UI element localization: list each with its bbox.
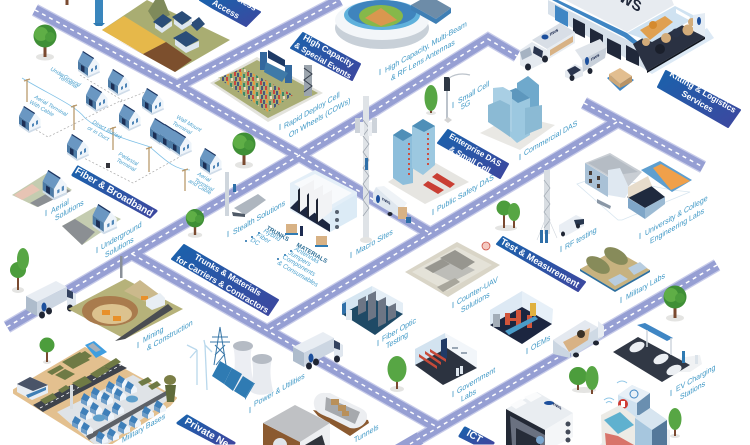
label: rapid deploy: Rapid Deploy Cell bbox=[284, 90, 340, 131]
label: power: Power & Utilities bbox=[254, 371, 305, 409]
panel: fixed wireless access bbox=[66, 0, 230, 72]
tunnel tube bbox=[314, 393, 367, 428]
panel: ict: nws bbox=[553, 401, 562, 412]
small cell pole bbox=[444, 74, 470, 123]
hq building bbox=[17, 377, 48, 400]
truck: loading 1 bbox=[520, 23, 575, 70]
label: macro sites: Macro Sites bbox=[356, 227, 393, 257]
pylon bbox=[210, 327, 230, 365]
banner: trunks and materials: Trunks & Materials bbox=[193, 252, 263, 298]
solar panels bbox=[212, 361, 255, 400]
label: underground solutions: Underground bbox=[101, 220, 142, 252]
label: government labs: Labs bbox=[461, 386, 476, 404]
classroom bbox=[627, 185, 665, 208]
label: ev charging: Stations bbox=[680, 379, 705, 402]
rf van bbox=[559, 215, 584, 236]
panel: high capacity events concert bbox=[210, 50, 323, 122]
terminal labels bbox=[28, 67, 215, 196]
drone mark bbox=[482, 242, 490, 250]
terminal labels: and Cable bbox=[187, 179, 212, 196]
panel: ict bbox=[506, 392, 573, 445]
front wall bbox=[548, 0, 647, 70]
panel: ev charging bbox=[613, 323, 702, 382]
panel: oems bbox=[490, 291, 553, 344]
label: tunnels: Tunnels bbox=[354, 422, 378, 445]
banner: fiber and broadband: Fiber & Broadband bbox=[73, 166, 155, 219]
aerial cable bbox=[22, 78, 190, 170]
terminal labels: Terminal bbox=[171, 121, 193, 137]
terminal labels: UnderGround bbox=[49, 67, 82, 89]
label: mining: & Construction bbox=[147, 318, 193, 353]
label: university: University & College bbox=[645, 193, 708, 238]
terminal labels: or in Duct bbox=[86, 126, 110, 143]
truck: loading 1: nws bbox=[549, 27, 559, 38]
label: counter uav: Solutions bbox=[461, 290, 490, 315]
banner: high capacity: High Capacity bbox=[301, 32, 356, 69]
pedestal terminal bbox=[106, 163, 110, 168]
list: trunks: TRUNKS bbox=[265, 226, 290, 243]
vehicles bbox=[40, 351, 161, 404]
poles bbox=[24, 79, 188, 191]
terminal labels: Direct Buried bbox=[91, 120, 123, 141]
trees: test and measurement bbox=[495, 200, 520, 231]
label: high capacity antennas: & RF Lens Antennas bbox=[391, 37, 455, 83]
label: rapid deploy: On Wheels (COWs) bbox=[289, 96, 351, 140]
list: materials: & Consumables bbox=[276, 260, 320, 289]
panel: kitting warehouse bbox=[548, 0, 714, 74]
corner pier bbox=[693, 13, 705, 37]
shelter truck: nws bbox=[382, 196, 391, 207]
label: small cell 5g: Small Cell bbox=[458, 79, 489, 106]
banner: enterprise das: & Small Cell bbox=[447, 144, 492, 175]
truck: left road bbox=[26, 281, 76, 318]
site outline bbox=[577, 176, 690, 220]
label: military labs: Military Labs bbox=[626, 271, 665, 302]
tree stub bbox=[66, 0, 68, 5]
banner: kitting and logistics: Services bbox=[680, 88, 715, 115]
terminal labels: Terminal bbox=[57, 75, 79, 91]
tunnel base bbox=[313, 410, 369, 436]
label: high capacity antennas: High Capacity, Multi-Beam bbox=[385, 19, 467, 75]
terminal labels: With Cable bbox=[28, 100, 55, 118]
label: military bases: Military Bases bbox=[122, 411, 165, 445]
panel: fiber and broadband homes bbox=[19, 51, 222, 196]
dock doors bbox=[555, 5, 639, 66]
panel: military bases bbox=[14, 341, 176, 444]
label: small cell 5g: 5G bbox=[461, 98, 470, 112]
portico bbox=[608, 168, 630, 198]
courtyard car bbox=[597, 199, 611, 209]
truck: mid road bbox=[293, 332, 343, 370]
cooling towers bbox=[232, 341, 273, 395]
panel: mining bbox=[68, 256, 183, 341]
panel: fiber optic testing bbox=[342, 286, 403, 335]
parking deck bbox=[411, 0, 451, 24]
label: oems: OEMs bbox=[531, 333, 550, 353]
label: rf testing: RF testing bbox=[565, 225, 597, 252]
gray compound bbox=[57, 375, 172, 444]
left wing bbox=[585, 163, 608, 197]
list: trunks: Hybrid bbox=[262, 228, 282, 243]
label: ev charging: EV Charging bbox=[676, 362, 715, 394]
panel: stealth solutions bbox=[225, 172, 266, 217]
terminal labels: Aerial bbox=[195, 171, 212, 184]
label: underground solutions: Solutions bbox=[105, 235, 134, 260]
glass block bbox=[635, 408, 667, 445]
pallets and worker bbox=[285, 224, 328, 247]
label: mining: Mining bbox=[143, 324, 163, 345]
tan base bbox=[14, 348, 176, 443]
panel: public safety das bbox=[388, 119, 469, 204]
panel: university labs bbox=[577, 153, 692, 220]
panel: aerial solutions plot bbox=[12, 170, 72, 207]
stock bbox=[640, 16, 696, 54]
server racks bbox=[298, 180, 332, 223]
robots bbox=[505, 310, 532, 328]
wireless tower bbox=[93, 0, 105, 26]
label: government labs: Government bbox=[457, 365, 496, 396]
label: aerial solutions: Solutions bbox=[55, 198, 84, 223]
list: materials: Jumpers bbox=[286, 249, 313, 269]
panel: power and utilities bbox=[187, 327, 273, 400]
panel: trunks warehouse bbox=[285, 170, 357, 247]
terminal labels: Aerial Terminal bbox=[32, 94, 69, 119]
icon: tree by small cell bbox=[424, 85, 438, 115]
panel: military labs bbox=[580, 243, 650, 292]
pallet bbox=[607, 68, 634, 91]
label: public safety: Public Safety DAS bbox=[437, 172, 494, 214]
banner: kitting and logistics: Kitting & Logistics bbox=[668, 69, 738, 115]
label: stealth solutions: Stealth Solutions bbox=[233, 198, 285, 237]
panel: underground solutions plot bbox=[62, 204, 121, 245]
trees: far left pair bbox=[10, 248, 29, 293]
list: materials: Components bbox=[281, 254, 317, 279]
banner: high capacity: & Special Events bbox=[293, 41, 353, 81]
cooling units bbox=[335, 210, 339, 229]
terminal labels: Wall Mount bbox=[175, 115, 203, 134]
fire trucks bbox=[423, 173, 455, 194]
banner: test and measurement: Test & Measurement bbox=[499, 236, 581, 290]
orange floor bbox=[641, 161, 692, 192]
list: materials bbox=[276, 243, 328, 289]
panel: counter uav bbox=[405, 242, 500, 297]
tree: right bbox=[664, 286, 686, 322]
label: university: Engineering Labs bbox=[650, 206, 704, 246]
banner: trunks and materials: for Carriers & Contractors bbox=[174, 254, 271, 315]
shaft cube bbox=[263, 423, 300, 445]
wifi marks bbox=[604, 381, 627, 403]
terminal labels: Pedestal bbox=[117, 152, 140, 168]
banner: ict bbox=[460, 428, 493, 445]
blue tents bbox=[72, 375, 166, 444]
truck: on right road bbox=[553, 320, 604, 358]
panel: commercial das bbox=[480, 76, 555, 150]
banner: kitting and logistics bbox=[658, 69, 740, 127]
roof bbox=[585, 153, 642, 188]
label: commercial das: Commercial DAS bbox=[524, 118, 577, 158]
wind turbines bbox=[187, 340, 212, 390]
tree: center bbox=[232, 132, 256, 168]
roof bbox=[565, 0, 674, 32]
list: materials: MATERIALS bbox=[295, 243, 328, 265]
rural houses bbox=[153, 11, 205, 47]
list: materials: Antennas bbox=[292, 245, 321, 266]
panel: macro site tower bbox=[355, 96, 411, 243]
interior floor bbox=[633, 20, 705, 71]
list: trunks: Fiber bbox=[255, 232, 272, 246]
main road bbox=[33, 362, 127, 412]
COW mast bbox=[304, 65, 312, 96]
inner road bbox=[86, 391, 169, 440]
harbour bbox=[85, 341, 107, 358]
rural plot bbox=[102, 0, 230, 72]
pad bbox=[640, 28, 714, 74]
dashed service lines bbox=[28, 75, 183, 183]
houses bbox=[19, 51, 222, 175]
tree: military bbox=[40, 338, 54, 364]
truck: loading 2: nws bbox=[591, 52, 600, 63]
racks bbox=[358, 291, 396, 327]
tree: stealth bbox=[186, 209, 204, 238]
panel: hospital bbox=[600, 381, 670, 445]
list: trunks: DC bbox=[249, 237, 261, 248]
list: trunks bbox=[245, 226, 290, 248]
label: small cell 5g bbox=[453, 79, 489, 112]
panel: rf testing bbox=[537, 170, 584, 243]
tree: upper left bbox=[34, 24, 56, 60]
panel: government labs bbox=[415, 333, 477, 385]
terminal labels: Terminal bbox=[193, 178, 215, 194]
panel: tunnels and underground bbox=[263, 393, 369, 445]
panel: stadium bbox=[335, 0, 451, 49]
truck: loading 2 bbox=[565, 39, 607, 81]
banner: enterprise das bbox=[438, 130, 508, 178]
tower bbox=[618, 385, 650, 420]
trees: lower right pair bbox=[569, 366, 598, 394]
left wing bbox=[601, 405, 637, 445]
banner: fixed wireless access bbox=[200, 0, 260, 26]
label: aerial solutions: Aerial bbox=[51, 197, 69, 216]
banner: enterprise das: Enterprise DAS bbox=[448, 132, 503, 169]
tree: lower center bbox=[388, 356, 406, 392]
tree: hospital bbox=[668, 408, 682, 438]
shelter truck bbox=[373, 186, 411, 223]
terminal labels: Terminal bbox=[115, 158, 137, 174]
interior back wall bbox=[627, 6, 697, 42]
stage bbox=[260, 50, 292, 83]
watch tower bbox=[164, 375, 176, 402]
label: counter uav: Counter-UAV bbox=[457, 274, 498, 307]
label: fiber optic testing: Testing bbox=[386, 329, 408, 351]
label: fiber optic testing: Fiber Optic bbox=[382, 315, 416, 344]
